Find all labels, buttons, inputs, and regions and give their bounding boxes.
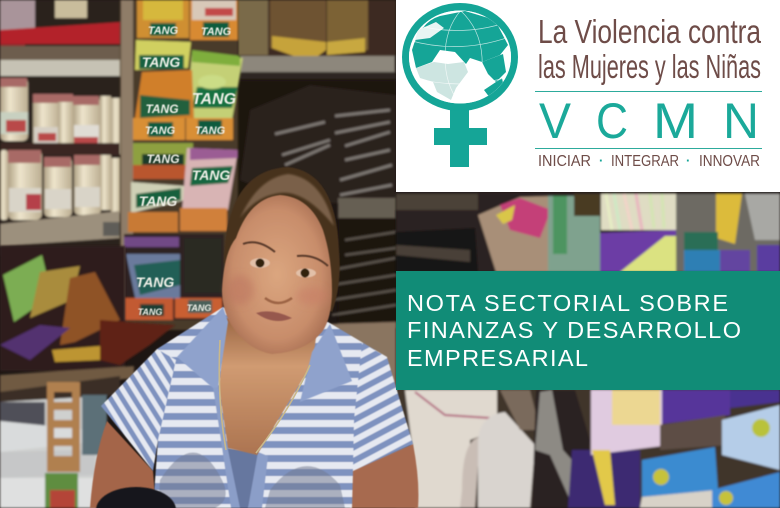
placket	[213, 387, 240, 508]
VCMN acronym: M	[653, 93, 698, 149]
face	[222, 195, 332, 354]
tagline: INTEGRAR	[611, 153, 679, 170]
VCMN acronym: N	[723, 93, 759, 149]
Tang labels: TANG	[192, 167, 230, 183]
title banner: FINANZAS Y DESARROLLO	[407, 317, 741, 343]
tagline: INNOVAR	[699, 153, 760, 170]
Tang labels: TANG	[136, 274, 174, 290]
striped shirt	[101, 307, 413, 508]
heading: programme name	[538, 13, 762, 85]
logo panel	[396, 0, 780, 192]
title banner	[396, 271, 780, 390]
Tang labels: TANG	[145, 102, 179, 116]
right side goods above banner	[396, 192, 780, 272]
title banner: EMPRESARIAL	[407, 345, 588, 371]
VCMN acronym: V	[539, 93, 572, 149]
Tang display	[120, 0, 243, 330]
tagline	[538, 153, 760, 170]
undershirt	[226, 448, 262, 508]
VCMN acronym: C	[596, 93, 628, 149]
hair	[224, 167, 340, 312]
top right shelf goods	[238, 0, 396, 80]
tagline: INICIAR	[538, 153, 591, 170]
icon: venus symbol with globe	[402, 3, 518, 167]
neck and chest	[219, 318, 318, 455]
Tang labels: TANG	[146, 152, 180, 166]
Tang labels	[136, 25, 236, 317]
Tang labels: TANG	[192, 91, 236, 108]
Tang labels: TANG	[142, 54, 180, 70]
printed pattern	[158, 452, 226, 508]
Tang labels: TANG	[195, 125, 226, 137]
tagline: ·	[686, 153, 690, 168]
left sleeve	[101, 349, 176, 471]
right sleeve	[353, 343, 413, 471]
Tang labels: TANG	[139, 193, 177, 209]
Tang labels: TANG	[138, 307, 162, 317]
Tang labels: TANG	[201, 26, 232, 38]
tagline: ·	[599, 153, 603, 168]
child's head at bottom	[96, 487, 176, 508]
Tang labels: TANG	[145, 125, 176, 137]
right side goods below banner	[396, 388, 780, 508]
Tang labels: TANG	[148, 25, 179, 37]
necklace	[219, 340, 310, 453]
Tang labels: TANG	[187, 303, 211, 313]
body	[153, 307, 387, 508]
title banner: NOTA SECTORIAL SOBRE	[407, 290, 728, 316]
VCMN acronym	[539, 93, 759, 149]
collars	[177, 307, 352, 402]
facial features	[226, 242, 328, 321]
dark snack bags	[232, 80, 398, 390]
lower left goods	[0, 246, 175, 508]
bare arms	[90, 421, 418, 508]
shelves with jars	[0, 0, 125, 256]
